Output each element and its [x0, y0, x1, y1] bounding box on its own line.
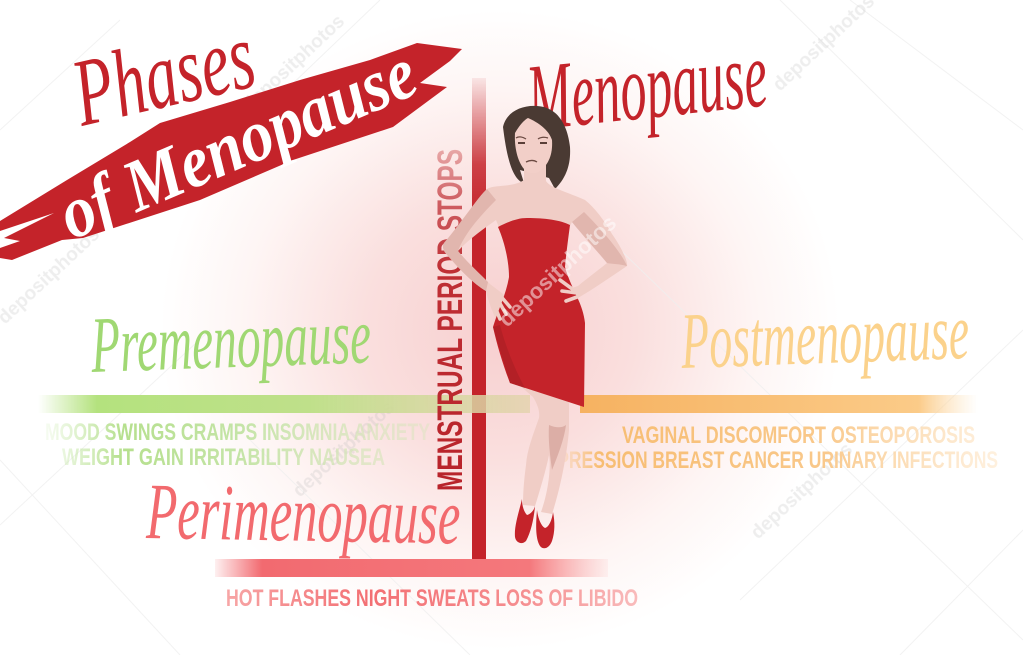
vertical menstrual period bar	[472, 78, 486, 559]
heading: Premenopause: Premenopause	[89, 292, 372, 390]
postmenopause symptoms	[533, 422, 998, 474]
premenopause symptoms	[45, 419, 430, 471]
premenopause green bar	[38, 395, 530, 413]
watermark text	[0, 0, 879, 544]
woman figure in red dress	[443, 106, 627, 548]
watermark text: depositphotos	[289, 397, 399, 502]
watermark text: depositphotos	[747, 439, 857, 544]
perimenopause symptoms: HOT FLASHES NIGHT SWEATS LOSS OF LIBIDO	[226, 585, 638, 612]
left shoe	[515, 499, 535, 543]
central pink radial glow	[150, 0, 870, 655]
vertical label: menstrual period stops: MENSTRUAL PERIOD STOPS	[431, 149, 470, 491]
right shoe	[536, 510, 554, 548]
watermark text: depositphotos	[239, 11, 349, 116]
premenopause symptoms: WEIGHT GAIN IRRITABILITY NAUSEA	[62, 444, 385, 471]
perimenopause red bar	[215, 559, 608, 577]
red dress	[493, 218, 585, 407]
hand fingers	[490, 280, 577, 319]
watermark over figure: depositphotos	[493, 210, 621, 332]
eyes and mouth	[516, 137, 548, 162]
eye pupils	[518, 142, 547, 144]
postmenopause orange bar	[580, 395, 978, 413]
hair back	[503, 106, 570, 189]
brush stroke banner	[0, 43, 462, 260]
heading: Perimenopause: Perimenopause	[145, 468, 461, 561]
arm shading	[443, 189, 496, 291]
legs	[518, 384, 569, 514]
heading: Menopause: Menopause	[521, 20, 772, 151]
arms and torso	[443, 165, 627, 323]
title: of Menopause: of Menopause	[47, 32, 428, 256]
face	[515, 118, 552, 173]
premenopause symptoms: MOOD SWINGS CRAMPS INSOMNIA ANXIETY	[45, 419, 430, 446]
dress shadow	[493, 325, 525, 388]
